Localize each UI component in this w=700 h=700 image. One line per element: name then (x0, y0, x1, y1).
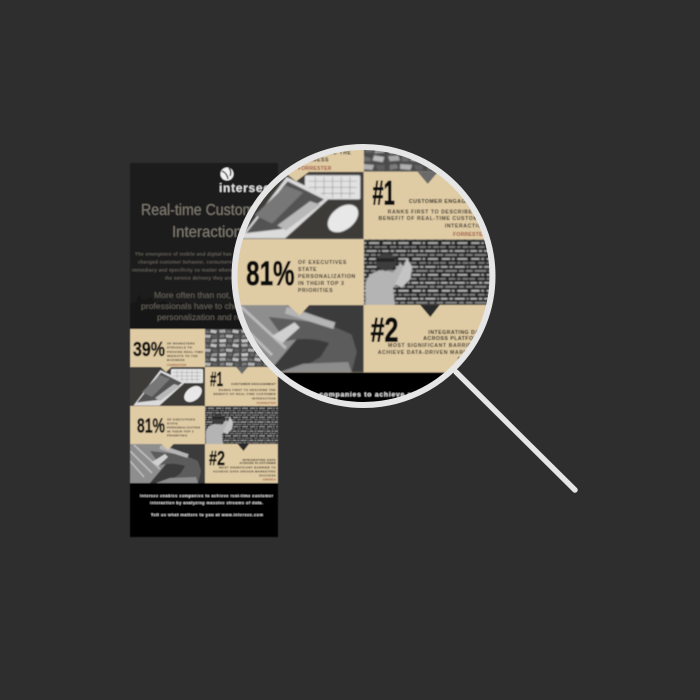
statistics grid: #2 (209, 448, 225, 470)
statistics grid: RANKS FIRST TO DESCRIBE THE (219, 388, 276, 392)
magnified statistics grid: 81% (246, 255, 295, 293)
title: Real-time Customer (141, 202, 268, 219)
magnifier handle (456, 372, 575, 490)
magnified statistics grid: PRIORITIES (298, 288, 333, 294)
magnified statistics grid: IN THEIR TOP 3 (298, 281, 344, 287)
magnified statistics grid: INTEGRATING DATA (428, 330, 487, 336)
statistics grid: MOST SIGNIFICANT BARRIER TO (219, 465, 276, 469)
magnified statistics grid: #2 (371, 311, 398, 349)
statistics grid: SUCCESS (259, 473, 276, 477)
magnified statistics grid: FORRESTER (453, 232, 487, 238)
statistics grid: #1 (210, 369, 223, 391)
footer panel: Tell us what matters to you at www.intersec.com (151, 512, 264, 517)
magnified statistics grid: BUSINESS (298, 157, 329, 163)
magnified statistics grid: ACHIEVE DATA-DRIVEN MARKETING (378, 350, 487, 356)
magnified statistics grid: INTERACTION (445, 224, 487, 230)
footer panel: interaction by analyzing massive streams of data. (150, 500, 263, 505)
statistics grid: ACHIEVE DATA-DRIVEN MARKETING (213, 469, 276, 473)
magnified statistics grid: FORRESTER (298, 166, 332, 172)
magnified statistics grid: CUSTOMER ENGAGEMENT (409, 199, 487, 205)
statistics grid: INSIGHTS TO THE (167, 354, 198, 358)
magnified statistics grid: Intersec enables companies to achieve real-time customer (251, 392, 482, 399)
intro paragraph: The emergence of mobile and digital has (135, 252, 232, 256)
infographic poster (130, 163, 287, 537)
statistics grid: PERSONALIZATION (167, 425, 200, 429)
intro paragraph: immediacy and specificity no matter where in (132, 268, 239, 272)
magnified statistics grid: #1 (372, 175, 395, 213)
title: Interaction (172, 224, 242, 241)
statistics grid: STATE (167, 421, 178, 425)
magnified statistics grid (241, 150, 490, 402)
magnified statistics grid: MOST SIGNIFICANT BARRIER TO (388, 343, 487, 349)
title (141, 202, 268, 241)
magnified statistics grid: BENEFIT OF REAL-TIME CUSTOMER (378, 216, 487, 222)
magnified statistics grid: ACROSS PLATFORMS (423, 336, 487, 342)
subheading paragraph: personalization and real-time (157, 312, 268, 322)
subheading paragraph: More often than not, marketing (154, 290, 271, 300)
magnified statistics grid: OF EXECUTIVES (298, 260, 347, 266)
magnifier lens (238, 150, 490, 402)
statistics grid: FORRESTER (257, 401, 277, 405)
statistics grid: INTEGRATING DATA (242, 458, 277, 462)
magnified statistics grid: RANKS FIRST TO DESCRIBE THE (388, 209, 487, 215)
logo icon (220, 168, 234, 180)
statistics grid: BUSINESS (167, 358, 185, 362)
statistics grid: ACROSS PLATFORMS (239, 461, 276, 465)
magnified statistics grid: STATE (298, 267, 317, 273)
intro paragraph (132, 252, 252, 280)
statistics grid: PRIORITIES (167, 434, 187, 438)
poster header panel (130, 163, 278, 329)
magnified statistics grid: INSIGHTS TO THE (298, 150, 351, 156)
statistics grid: PROVIDE REAL-TIME (167, 350, 203, 354)
intro paragraph: changed customer behavior, consumers demand (138, 260, 252, 264)
statistics grid: ANDREA (263, 478, 277, 482)
footer panel: Intersec enables companies to achieve real-time customer (140, 493, 273, 498)
statistics grid: 39% (133, 339, 165, 361)
statistics grid: OF EXECUTIVES (167, 417, 195, 421)
magnifier infographic scene (129, 144, 578, 538)
statistics grid (130, 329, 278, 483)
magnified statistics grid: ANDREA (463, 364, 487, 370)
statistics grid: BENEFIT OF REAL-TIME CUSTOMER (213, 392, 277, 396)
magnifier ring (234, 147, 492, 405)
footer panel (130, 483, 278, 537)
statistics grid: STRUGGLE TO (167, 346, 193, 350)
statistics grid: IN THEIR TOP 3 (167, 430, 194, 434)
statistics grid: FORRESTER (167, 363, 187, 367)
statistics grid: CUSTOMER ENGAGEMENT (231, 382, 276, 386)
statistics grid: 81% (137, 416, 165, 438)
statistics grid: OF MARKETERS (167, 342, 195, 346)
magnified statistics grid: PERSONALIZATION (298, 274, 356, 280)
intro paragraph: the service delivery they are. (165, 276, 234, 280)
subheading paragraph (141, 290, 287, 322)
statistics grid: INTERACTION (252, 396, 276, 400)
subheading paragraph: professionals have to choose between (141, 301, 287, 311)
magnified statistics grid: SUCCESS (458, 357, 487, 363)
magnified statistics grid: interaction by analyzing massive streams of data. (269, 404, 464, 411)
logo wordmark: intersec (219, 181, 271, 195)
